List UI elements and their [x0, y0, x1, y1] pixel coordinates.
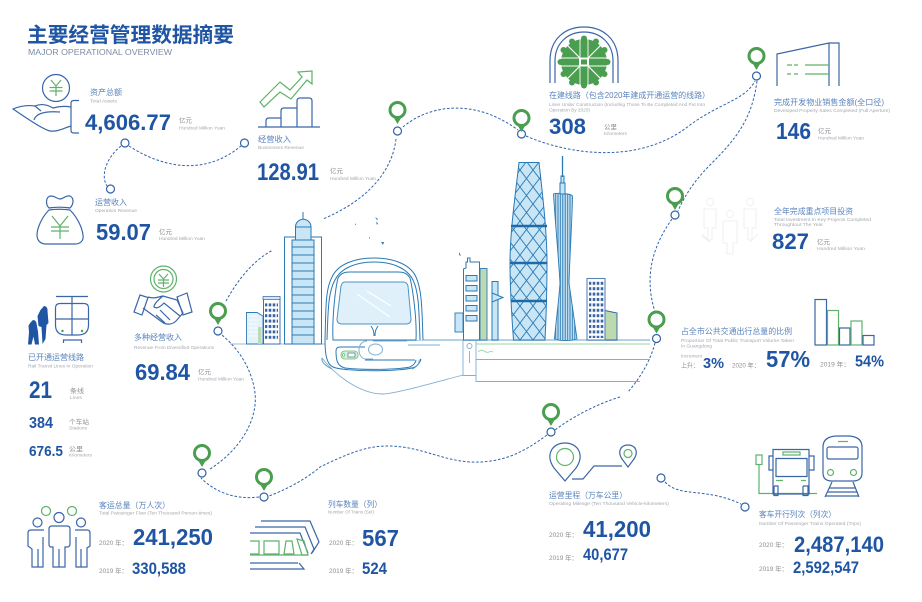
- increment: Increment: [681, 354, 703, 358]
- 2019 value: 2019 年：: [549, 553, 578, 562]
- panel: rail lines in operation: Rail Transit Lines In Operation: [28, 364, 94, 368]
- station count: 384: [29, 415, 53, 432]
- panel: diversified operations revenue: Revenue From Diversified Operations: [134, 345, 215, 350]
- panel: property sales: Developed Property Sales Completed (Full Aperture): [774, 108, 891, 113]
- panel: key project investment: Throughtout The Year: [774, 222, 824, 227]
- panel: operation revenue: Operation Revenue: [95, 208, 138, 213]
- panel: rail lines in operation: 公里: [69, 445, 84, 453]
- unit: 亿元: [159, 227, 172, 236]
- value: 827: [772, 229, 809, 254]
- canton tower: [554, 156, 577, 340]
- value: 59.07: [96, 219, 151, 245]
- panel: rail lines in operation: Lines: [70, 395, 83, 400]
- unit: 亿元: [198, 367, 212, 376]
- 2019 value: 2019 年：: [820, 360, 850, 368]
- icon: three people: [28, 506, 90, 567]
- dashed route connecting the metrics: [104, 81, 757, 504]
- panel: passenger trains operated: 2,592,547: [793, 559, 859, 577]
- panel: key project investment: [702, 198, 872, 254]
- label: 占全市公共交通出行总量的比例: [681, 326, 792, 336]
- panel: passenger flow: 330,588: [132, 560, 186, 578]
- icon: money bag: [37, 196, 83, 244]
- green location pins: [194, 48, 764, 491]
- label: 完成开发物业销售金额(全口径): [774, 97, 884, 107]
- title: MAJOR OPERATIONAL OVERVIEW: [28, 47, 172, 57]
- label: 运营里程（万车公里）: [549, 490, 627, 500]
- bar chart: [815, 300, 874, 345]
- icon: map pins and route: [550, 443, 636, 481]
- panel: operating mileage: 40,677: [583, 546, 628, 564]
- line count: 21: [29, 377, 52, 404]
- panel: business revenue: Businesses Revenue: [258, 145, 305, 150]
- left buildings: [246, 212, 322, 344]
- icon: faint workers: [702, 198, 758, 254]
- panel: lines under construction: Operation By 2020): [549, 108, 591, 112]
- title: 主要经营管理数据摘要: [27, 23, 234, 47]
- value: 4,606.77: [85, 110, 171, 135]
- panel: key project investment: Total Investment In Key Projects Completed: [774, 217, 872, 222]
- icon: arch and green rail medallion: [550, 27, 618, 88]
- panel: public transport share: Proportion Of Total Public Transport Volume Taken: [681, 338, 795, 343]
- label: 经营收入: [258, 134, 291, 144]
- panel: operating mileage: 41,200: [583, 516, 651, 542]
- label: 多种经营收入: [134, 332, 182, 342]
- right office buildings: [587, 278, 617, 340]
- icon: building outline: [777, 43, 839, 86]
- 2020 value: 2020 年：: [732, 360, 760, 370]
- icon: handshake and coin: [134, 266, 192, 324]
- panel: passenger trains operated: [756, 436, 884, 577]
- label: 运营收入: [95, 197, 127, 207]
- panel: rail lines in operation: Kilometers: [69, 452, 93, 458]
- kilometres: 676.5: [29, 443, 63, 460]
- value: 146: [776, 118, 811, 144]
- label: 列车数量（列）: [328, 499, 382, 509]
- unit: 亿元: [818, 126, 832, 135]
- 2020 value: 2020 年：: [99, 538, 128, 547]
- panel: lines under construction: Lines Under Construction (Including Those To Be Completed And Put Into: [549, 102, 706, 107]
- unit: 公里: [604, 123, 618, 131]
- panel: total assets: Total Assets: [90, 98, 118, 104]
- 2019 value: 2019 年：: [759, 564, 788, 573]
- ground and track lines: [230, 340, 650, 394]
- central buildings: [455, 258, 503, 340]
- icon: train side view: [250, 521, 319, 569]
- label: 客运总量（万人次）: [99, 500, 170, 510]
- panel: number of trains: Number Of Trains (Set): [328, 510, 374, 514]
- icon: bus stop, bus and train: [756, 436, 862, 497]
- label: 在建线路（包含2020年建成开通运营的线路）: [549, 90, 710, 100]
- panel: diversified operations revenue: Hundred Million Yuan: [198, 376, 245, 382]
- value: 308: [549, 114, 586, 139]
- panel: property sales: [774, 43, 891, 144]
- panel: number of trains: 524: [362, 560, 388, 578]
- birds: [355, 217, 461, 256]
- panel: passenger flow: 241,250: [133, 524, 213, 550]
- label: 客车开行列次（列次）: [759, 509, 836, 519]
- panel: number of trains: 567: [362, 525, 399, 551]
- panel: rail lines in operation: 条线: [70, 386, 85, 395]
- label: 资产总额: [90, 87, 122, 97]
- panel: operation revenue: [37, 196, 206, 245]
- panel: rail lines in operation: [28, 296, 94, 460]
- panel: rail lines in operation: Stations: [69, 426, 88, 430]
- panel: diversified operations revenue: [134, 266, 245, 385]
- panel: lines under construction: [549, 27, 710, 139]
- panel: passenger trains operated: Number Of Passenger Trains Operated (Trips): [759, 521, 862, 526]
- label: 全年完成重点项目投资: [774, 206, 853, 216]
- panel: property sales: Hundred Million Yuan: [818, 136, 865, 140]
- unit: 亿元: [179, 116, 192, 124]
- panel: public transport share: In Guangdong: [681, 344, 713, 348]
- panel: public transport share: [681, 300, 884, 372]
- panel: rail lines in operation: 个车站: [69, 417, 90, 426]
- 2019 value: 2019 年：: [99, 566, 128, 575]
- panel: passenger flow: [28, 500, 213, 578]
- panel: key project investment: Hundred Million Yuan: [817, 246, 866, 251]
- icon: rising bars and arrow: [258, 71, 320, 127]
- icon: hand holding yen coin: [13, 74, 79, 133]
- 2020 value: 2020 年：: [329, 538, 358, 547]
- panel: public transport share: 57%: [766, 346, 810, 372]
- panel: operating mileage: Operating Milesge (Ten Thousand Vehicle-kilometers): [549, 501, 670, 506]
- central city skyline and metro train: [230, 156, 650, 394]
- panel: passenger flow: Total Passenger Flow (Ten Thousand Person-times): [99, 510, 213, 516]
- panel: business revenue: Hundred Million Yuan: [330, 176, 377, 181]
- unit: 亿元: [330, 166, 344, 175]
- panel: passenger trains operated: 2,487,140: [794, 532, 884, 557]
- guangzhou west tower: [510, 162, 547, 340]
- panel: total assets: [13, 74, 226, 135]
- label: 已开通运营线路: [28, 352, 84, 362]
- route node circles: [106, 72, 760, 511]
- unit: 亿元: [817, 237, 830, 246]
- 2019 value: 2019 年：: [329, 566, 358, 575]
- 2020 value: 2020 年：: [549, 530, 578, 539]
- panel: public transport share: 3%: [703, 356, 724, 372]
- title: [27, 23, 234, 57]
- panel: public transport share: 54%: [855, 354, 884, 370]
- panel: number of trains: [250, 499, 399, 578]
- panel: business revenue: [257, 71, 377, 186]
- metro train front: [322, 258, 440, 371]
- 2020 value: 2020 年：: [759, 540, 788, 549]
- value: 69.84: [135, 359, 190, 385]
- panel: lines under construction: Kilometers: [604, 131, 628, 136]
- icon: passengers and train: [28, 296, 88, 344]
- panel: total assets: Hundred Million Yuan: [179, 126, 226, 130]
- value: 128.91: [257, 159, 319, 186]
- panel: operation revenue: Hundred Million Yuan: [159, 236, 206, 241]
- panel: operating mileage: [549, 443, 670, 564]
- panel: public transport share: 上升：: [681, 360, 699, 370]
